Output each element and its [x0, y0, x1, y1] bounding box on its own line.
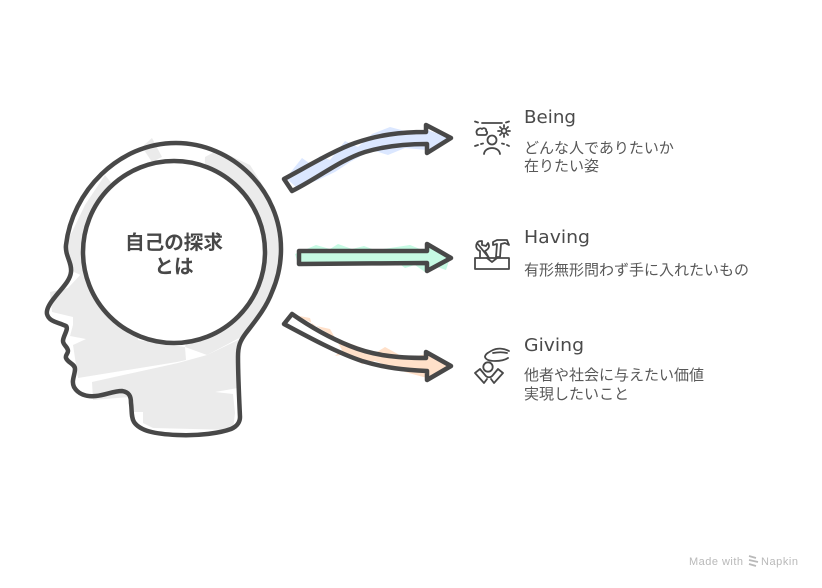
icon: toolbox with wrench and hammer	[475, 240, 509, 269]
footer: Made with Napkin	[689, 556, 798, 568]
description: Being: どんな人でありたいか	[524, 140, 674, 157]
arrow fill: green	[295, 244, 450, 272]
icon: hand above person	[475, 349, 509, 383]
icon: person under sun and cloud	[475, 122, 510, 154]
inner circle background	[83, 161, 265, 343]
heading: Giving: Giving	[524, 335, 584, 356]
item: Being	[475, 107, 674, 175]
head illustration	[47, 138, 282, 435]
arrow outline: orange	[284, 314, 451, 380]
item: Giving	[475, 335, 704, 403]
arrow fill: orange	[294, 315, 451, 378]
description: Having: 有形無形問わず手に入れたいもの	[524, 262, 749, 279]
footer text left: Made with	[689, 556, 743, 568]
arrow fill: blue	[286, 127, 451, 188]
description line 2: Giving: 実現したいこと	[524, 386, 629, 403]
footer text right: Napkin	[761, 556, 798, 568]
center title: 自己の探求	[125, 231, 223, 254]
arrow: Giving	[284, 314, 451, 380]
icon: Napkin logo	[749, 556, 758, 566]
heading: Having: Having	[524, 227, 590, 248]
center subtitle: とは	[154, 256, 194, 278]
arrow: Having	[295, 244, 451, 272]
description: Giving: 他者や社会に与えたい価値	[524, 367, 704, 384]
arrow: Being	[284, 125, 451, 191]
arrow outline: blue	[284, 125, 451, 191]
arrow outline: green	[299, 244, 451, 271]
head outline	[47, 143, 281, 435]
item: Having	[475, 227, 749, 279]
heading: Being: Being	[524, 107, 576, 128]
description line 2: Being: 在りたい姿	[524, 158, 599, 175]
inner circle outline	[83, 161, 265, 343]
head hachure fill	[50, 138, 282, 430]
